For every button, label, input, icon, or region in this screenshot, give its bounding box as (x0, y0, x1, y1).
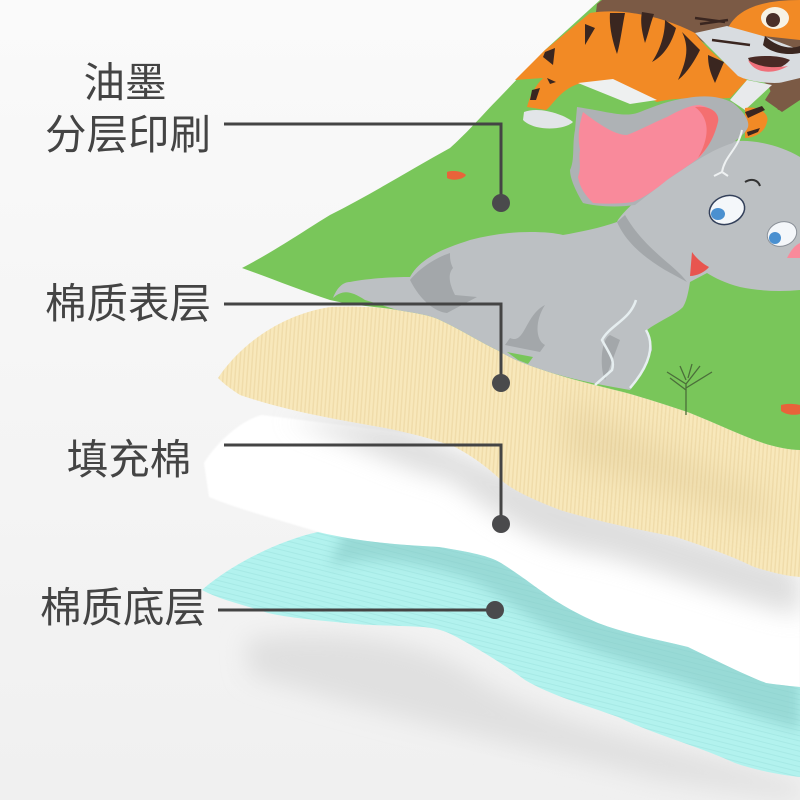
callout line: filling (224, 445, 510, 533)
illustration: brown backdrop (590, 0, 800, 110)
tiger whiskers (695, 18, 750, 45)
elephant shading (410, 253, 477, 313)
brown post (765, 78, 800, 112)
soft shading on beige layer (560, 400, 780, 530)
layer: beige cotton top (218, 307, 800, 577)
elephant forehead mark (714, 130, 742, 176)
label: ink layer printing: 油墨 (83, 59, 167, 106)
label: ink layer printing: 分层印刷 (45, 111, 211, 158)
elephant eye right (764, 218, 800, 250)
tiger body (515, 11, 747, 110)
tiger mouth (748, 56, 790, 70)
tiger eye (761, 7, 789, 29)
layer: green printed fabric (242, 0, 800, 450)
illustration: tiger (515, 0, 800, 138)
tiger stripes (530, 12, 724, 100)
tiger nose (763, 36, 800, 54)
tiger neck (730, 80, 772, 110)
shadow of the beige layer on the filling (285, 420, 800, 615)
label: cotton top layer: 棉质表层 (45, 280, 211, 327)
darker band on teal layer (330, 530, 800, 730)
elephant trunk tip (787, 243, 800, 258)
callout line: cotton top (224, 304, 510, 392)
green patch under elephant (507, 352, 533, 364)
elephant leg highlights (595, 300, 650, 388)
label: filling cotton: 填充棉 (67, 436, 191, 483)
elephant mouth (690, 252, 709, 276)
callout line: cotton bottom (218, 601, 504, 619)
tiger rear leg (745, 107, 768, 138)
label: ink layer printing (45, 59, 211, 158)
layer: teal cotton bottom (202, 530, 800, 777)
callout line: ink (224, 124, 510, 212)
layer: white filling cotton (204, 415, 800, 700)
tiger front paw (523, 110, 573, 128)
illustration: elephant (333, 96, 800, 390)
elephant eyebrow (745, 180, 760, 186)
illustration: small plant (667, 364, 712, 415)
ground shadow under bottom layer (245, 634, 800, 800)
elephant eye left (705, 191, 749, 229)
elephant body and head (333, 141, 800, 390)
illustration: red flowers (447, 171, 800, 415)
tiger belly (578, 79, 657, 104)
tiger face (727, 0, 800, 40)
elephant ear pink (578, 105, 718, 204)
elephant ear outer (570, 96, 748, 206)
label: cotton bottom layer: 棉质底层 (40, 584, 206, 631)
